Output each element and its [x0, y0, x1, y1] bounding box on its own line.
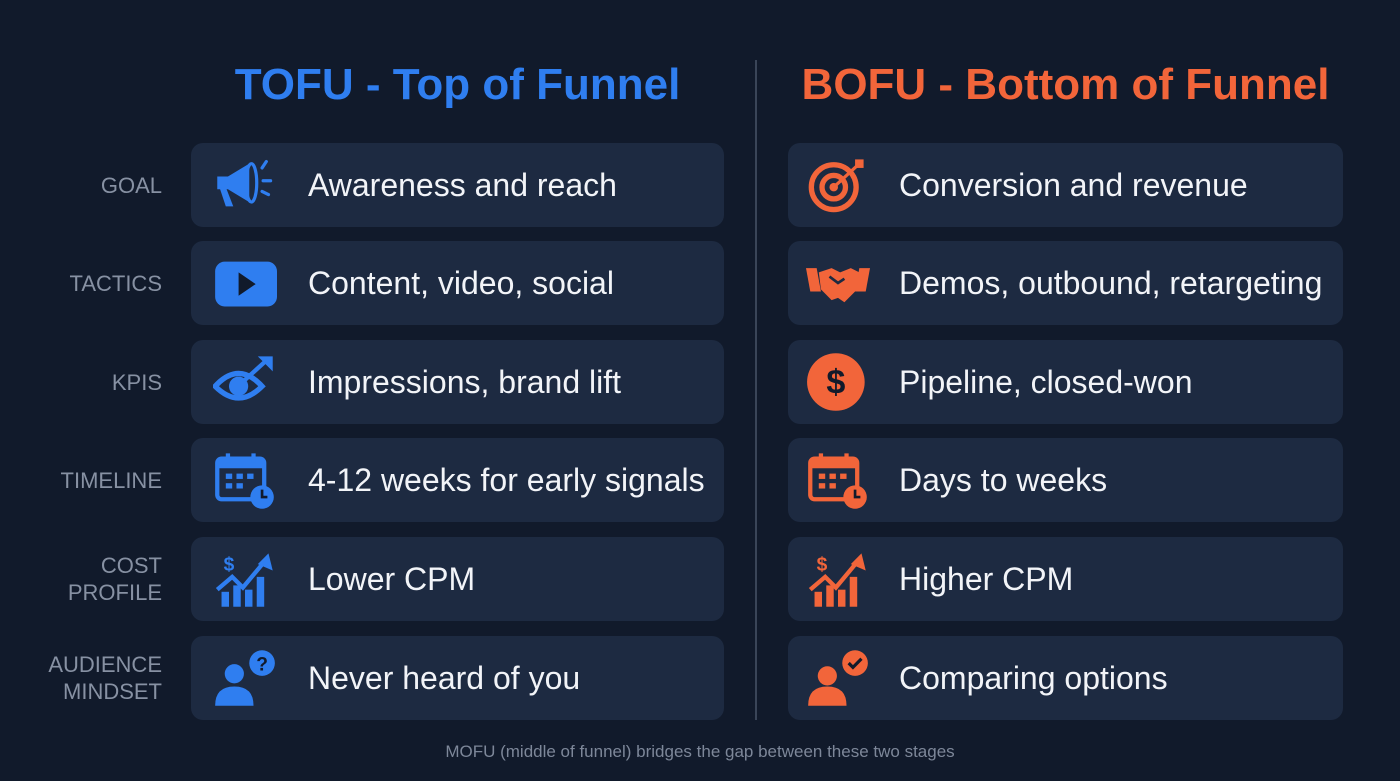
label: audience mindset	[48, 652, 162, 704]
icon: rising chart	[809, 554, 866, 607]
icon: target	[808, 159, 864, 212]
icon: megaphone	[217, 160, 272, 206]
card: TOFU goal: Awareness and reach	[308, 167, 617, 203]
card: BOFU kpis: Pipeline, closed-won	[899, 364, 1192, 400]
card: TOFU timeline: 4-12 weeks for early signals	[308, 462, 705, 498]
card: BOFU cost: Higher CPM	[899, 561, 1073, 597]
card: TOFU cost	[191, 537, 724, 621]
icon: rising chart: $	[224, 554, 235, 575]
label: kpis: KPIS	[112, 370, 162, 395]
card: BOFU cost	[788, 537, 1343, 621]
label: tactics: TACTICS	[70, 271, 162, 296]
card: BOFU audience	[788, 636, 1343, 720]
label: cost profile: PROFILE	[68, 580, 162, 605]
icon: handshake	[806, 268, 870, 302]
icon: calendar clock	[215, 453, 274, 509]
card: TOFU audience: Never heard of you	[308, 660, 580, 696]
divider	[755, 60, 757, 720]
card: BOFU tactics: Demos, outbound, retargeting	[899, 265, 1322, 301]
card: TOFU cost: Lower CPM	[308, 561, 475, 597]
footer note: MOFU (middle of funnel) bridges the gap between these two stages	[445, 742, 955, 761]
card: BOFU audience: Comparing options	[899, 660, 1168, 696]
icon: dollar coin: $	[826, 364, 845, 402]
card: TOFU audience	[191, 636, 724, 720]
label: audience mindset: MINDSET	[63, 679, 162, 704]
label: cost profile: COST	[101, 553, 162, 578]
card: BOFU timeline	[788, 438, 1343, 522]
icon: rising chart	[216, 554, 273, 607]
label: timeline: TIMELINE	[61, 468, 162, 493]
card: TOFU tactics: Content, video, social	[308, 265, 614, 301]
card: BOFU goal: Conversion and revenue	[899, 167, 1248, 203]
card: TOFU timeline	[191, 438, 724, 522]
card: TOFU kpis: Impressions, brand lift	[308, 364, 621, 400]
icon: eye with arrow	[213, 356, 273, 401]
icon: person question	[215, 650, 275, 706]
label: cost profile	[68, 553, 162, 605]
title: TOFU: TOFU - Top of Funnel	[235, 60, 680, 109]
icon: person check	[808, 650, 868, 706]
card: BOFU goal	[788, 143, 1343, 227]
card: TOFU tactics	[191, 241, 724, 325]
icon: calendar clock	[808, 453, 867, 509]
label: goal: GOAL	[101, 173, 162, 198]
card: TOFU goal	[191, 143, 724, 227]
icon: rising chart: $	[817, 554, 828, 575]
title: BOFU: BOFU - Bottom of Funnel	[802, 60, 1329, 109]
label: audience mindset: AUDIENCE	[48, 652, 162, 677]
card: BOFU kpis	[788, 340, 1343, 424]
card: TOFU kpis	[191, 340, 724, 424]
icon: person question: ?	[256, 655, 268, 676]
card: BOFU tactics	[788, 241, 1343, 325]
card: BOFU timeline: Days to weeks	[899, 462, 1107, 498]
icon: video play	[215, 262, 277, 306]
icon: dollar coin	[807, 353, 865, 411]
